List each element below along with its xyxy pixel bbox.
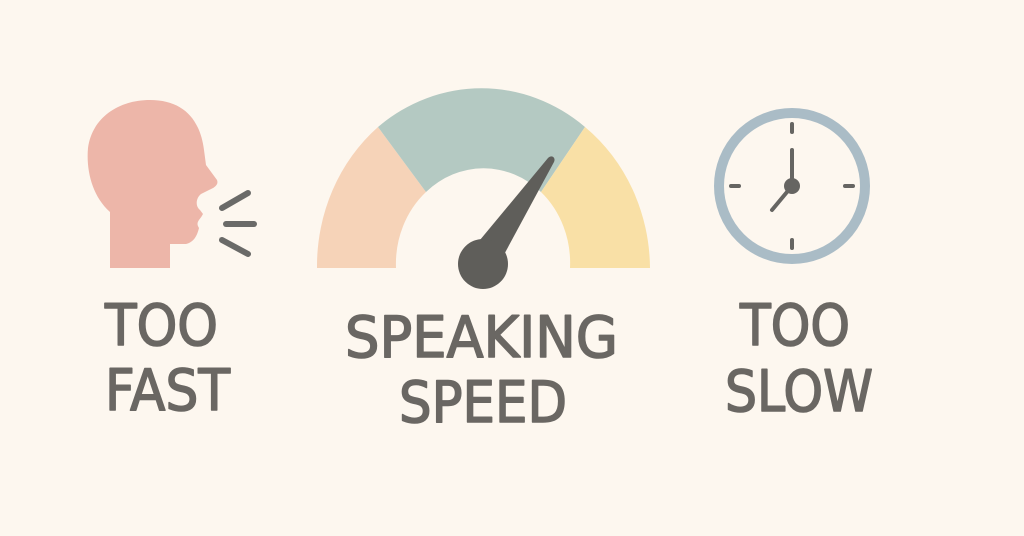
label: too slow bbox=[725, 293, 873, 425]
gauge segment: right yellow bbox=[541, 127, 650, 268]
label: speaking speed bbox=[345, 305, 618, 436]
label: speaking speed: SPEAKING bbox=[345, 305, 618, 371]
label: too fast: TOO bbox=[104, 293, 218, 359]
label: too fast: FAST bbox=[105, 358, 230, 424]
icon: clock bbox=[719, 113, 865, 259]
gauge segment: middle teal bbox=[378, 88, 585, 192]
icon: speech lines bbox=[222, 193, 254, 254]
gauge segment: left peach bbox=[317, 127, 426, 268]
gauge needle bbox=[458, 156, 555, 289]
gauge bbox=[317, 88, 650, 289]
label: too slow: SLOW bbox=[725, 359, 873, 425]
icon: speaking head bbox=[88, 100, 254, 268]
label: too fast bbox=[104, 293, 230, 424]
label: too slow: TOO bbox=[739, 293, 850, 359]
label: speaking speed: SPEED bbox=[399, 370, 567, 436]
